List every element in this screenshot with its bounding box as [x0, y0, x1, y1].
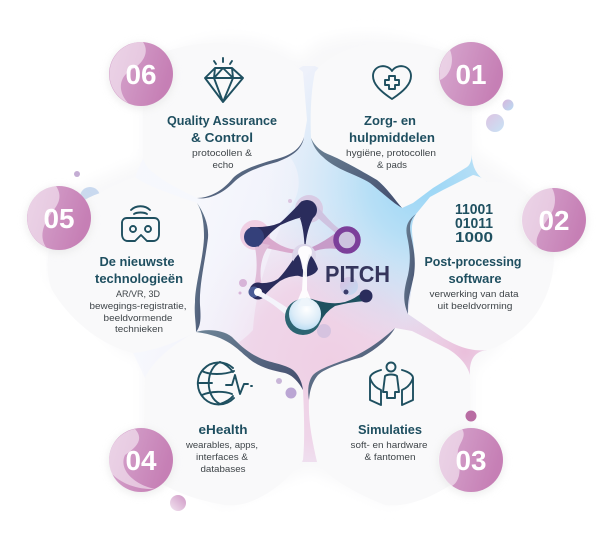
description line 2: interfaces & [196, 452, 249, 463]
panel glow backdrop [50, 36, 553, 505]
description: hygiëne, protocollen [346, 148, 436, 159]
heading: eHealth [198, 423, 248, 437]
icon: heart with cross [373, 66, 411, 99]
node: small ring [248, 282, 266, 300]
heading line 2: software [448, 272, 502, 286]
panel: 02 shape [408, 175, 554, 350]
description line 4: technieken [115, 324, 163, 335]
panel 04: ehealth [108, 362, 258, 495]
badge 02: 02 [538, 205, 570, 236]
edge: left panel [195, 203, 208, 332]
panel 03: simulaties [350, 362, 504, 495]
molecule: PITCH logo graphic [238, 195, 372, 338]
badge 03 [438, 428, 504, 495]
node: purple ring [336, 229, 358, 251]
description line 2: uit beeldvorming [438, 301, 512, 312]
bubble behind badge 05 [80, 187, 100, 207]
icon: globe with pulse [198, 362, 252, 404]
icon: binary digits [455, 201, 493, 246]
badge 02 [521, 188, 587, 255]
badge 05: 05 [44, 203, 74, 234]
description line 3: beeldvormende [104, 313, 172, 324]
bubbles: decorative dots [74, 100, 514, 511]
node: dark right [360, 290, 372, 302]
node: centre [290, 244, 318, 302]
description: wearables, apps, [185, 440, 258, 451]
icon: person in cylinder [370, 362, 413, 405]
heading line 2: & Control [191, 131, 253, 145]
icon: binary digits: 11001 [455, 201, 493, 218]
panel 05: de nieuwste technologieen [26, 186, 186, 335]
icon: binary digits: 1000 [455, 229, 493, 246]
description line 2: echo [212, 160, 234, 171]
heading line 2: hulpmiddelen [349, 131, 435, 145]
edge: bottom-left panel [196, 330, 303, 390]
logo wordmark: PITCH [325, 261, 390, 287]
heading: Quality Assurance [167, 114, 277, 128]
edge: right panel [404, 214, 416, 314]
icon: VR headset [122, 206, 159, 241]
description line 2: bewegings-registratie, [90, 301, 186, 312]
badge 01: 01 [456, 59, 486, 90]
description: soft- en hardware [350, 440, 428, 451]
heading: De nieuwste [100, 255, 175, 269]
description line 3: databases [200, 464, 246, 475]
panel: 03 shape [309, 328, 472, 505]
description line 2: & pads [377, 160, 407, 171]
panel: 04 shape [143, 332, 304, 505]
heading: Zorg- en [364, 114, 416, 128]
edge: top-right panel [311, 138, 402, 208]
node: top navy [297, 200, 317, 220]
description: protocollen & [192, 148, 253, 159]
connector: white links [258, 292, 289, 316]
panel 06: quality assurance [108, 42, 277, 171]
panel 02: post-processing software [424, 188, 587, 312]
node: left navy [244, 227, 264, 247]
edge: bottom-right panel [308, 328, 395, 400]
badge 03: 03 [456, 445, 486, 476]
halo bubbles [238, 195, 331, 338]
edge: top-left panel [197, 137, 304, 198]
badge 04 [108, 428, 174, 495]
node: large teal ball [285, 298, 321, 335]
panel: 05 shape [47, 177, 206, 353]
icon: diamond [205, 58, 243, 102]
description: verwerking van data [430, 289, 519, 300]
badge 04: 04 [126, 445, 157, 476]
panel: 01 shape [311, 42, 472, 208]
connectors [250, 201, 365, 323]
pale left overlay of core [133, 157, 299, 378]
badge 05 [26, 186, 92, 253]
description line 2: & fantomen [364, 452, 416, 463]
icon: binary digits: 01011 [455, 215, 493, 232]
heading line 2: technologieën [95, 272, 183, 286]
panel 01: zorg- en hulpmiddelen [346, 42, 504, 171]
bubble: right of logo [340, 277, 358, 295]
panel: 06 shape [143, 43, 307, 198]
heading: Simulaties [358, 423, 422, 437]
heading: Post-processing [424, 255, 522, 269]
badge 06: 06 [126, 59, 156, 90]
description: AR/VR, 3D [116, 289, 160, 300]
central gradient star [133, 66, 487, 462]
badge 06 [108, 42, 174, 109]
badge 01 [438, 42, 504, 109]
